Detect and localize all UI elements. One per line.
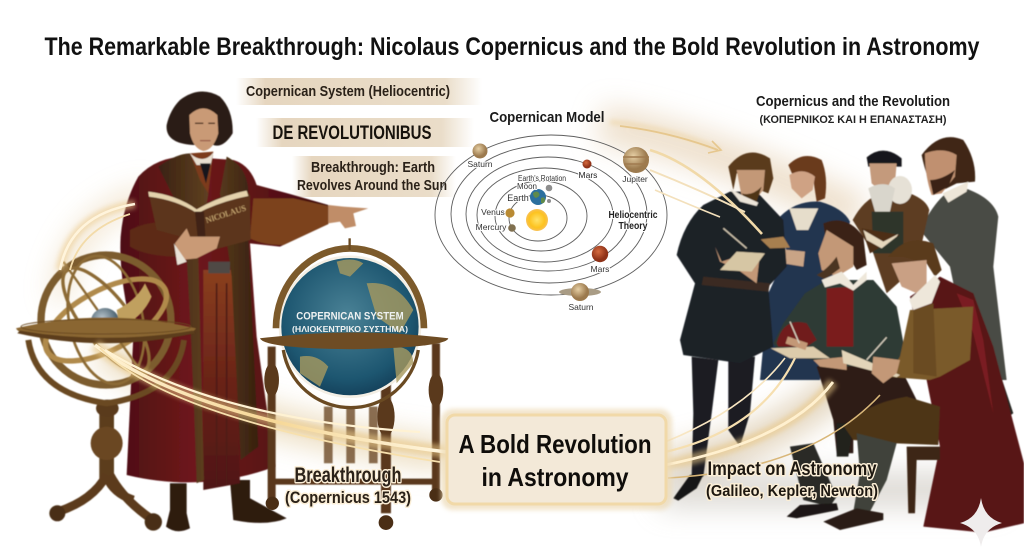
meridian arc	[276, 248, 424, 328]
heliocentric diagram	[435, 109, 667, 312]
caption: Impact on Astronomy	[706, 459, 878, 500]
pointing hand	[328, 205, 368, 228]
heading: Copernicus and the Revolution: Copernicus and the Revolution	[756, 94, 950, 110]
orbits	[435, 135, 667, 295]
planet: Mercury: Mercury	[476, 222, 507, 232]
gold streak: centre to scholars	[665, 358, 880, 478]
planet: upper Mars	[579, 160, 597, 180]
sun	[526, 209, 548, 231]
planet: Venus: Venus	[481, 207, 505, 217]
scholar: old man in ruff	[853, 151, 929, 293]
robe	[120, 157, 328, 482]
label: Heliocentric Theory: Heliocentric	[608, 209, 658, 221]
planet: upper Saturn	[467, 144, 493, 169]
hair	[167, 92, 233, 146]
shoes and legs	[166, 480, 287, 531]
horizon ring	[260, 332, 448, 349]
scholar: woman in blue	[760, 156, 850, 380]
heading: Copernicus and the Revolution	[756, 94, 950, 126]
globe labels: COPERNICAN SYSTEM	[296, 310, 404, 322]
scholar: seated man with red cape	[823, 240, 1024, 533]
sash band	[117, 283, 152, 328]
centre box: A Bold Revolution in Astronomy: A Bold Revolution	[458, 429, 652, 459]
left hand	[175, 228, 220, 260]
heading: Copernican Model: Copernican Model	[490, 109, 604, 126]
ribbon: De Revolutionibus	[256, 118, 474, 147]
globe sublabel: (ΗΛΙΟΚΕΝΤΡΙΚΟ ΣΥΣΤΗΜΑ)	[292, 324, 408, 334]
ribbon: De Revolutionibus: DE REVOLUTIONIBUS	[272, 123, 432, 144]
tunic	[203, 270, 240, 490]
caption: Breakthrough: Breakthrough	[294, 464, 402, 487]
continents	[300, 260, 413, 387]
armillary sphere	[16, 249, 196, 531]
heading: Copernicus and the Revolution: (ΚΟΠΕΡΝΙΚΟΣ ΚΑΙ Η ΕΠΑΝΑΣΤΑΣΗ)	[760, 114, 947, 126]
lower cradle	[28, 340, 184, 403]
planet: Earth with moon	[507, 174, 566, 205]
sparkle	[960, 498, 1002, 547]
planet: upper Mars: Mars	[579, 170, 597, 180]
scholar: seated man in red and green	[771, 220, 923, 518]
planet: Earth with moon: Earth	[507, 193, 529, 203]
label: Heliocentric Theory	[608, 209, 658, 232]
planet: upper Saturn: Saturn	[467, 159, 493, 169]
planet: lower Saturn: Saturn	[568, 302, 594, 312]
book	[148, 191, 251, 253]
belt	[208, 262, 230, 273]
rings	[33, 249, 179, 391]
gold arrow: model to scholars	[610, 122, 762, 234]
planet: Earth with moon: Earth's Rotation	[518, 174, 566, 183]
centre box: A Bold Revolution in Astronomy	[441, 409, 672, 510]
sphere	[91, 308, 119, 337]
ribbon: Copernican System	[236, 78, 482, 105]
ribbon: Earth revolves: Revolves Around the Sun	[297, 178, 447, 194]
ribbon: Earth revolves: Breakthrough: Earth	[311, 160, 435, 176]
caption: Impact on Astronomy: (Galileo, Kepler, Newton)	[706, 483, 878, 500]
horizon ring	[16, 317, 196, 342]
ribbon: Earth revolves	[292, 156, 456, 197]
fur trim	[158, 153, 258, 483]
label: Heliocentric Theory: Theory	[618, 220, 648, 232]
scholar: man in black doublet	[673, 152, 790, 501]
centre box: A Bold Revolution in Astronomy: in Astronomy	[482, 462, 629, 492]
planet: Venus	[481, 207, 515, 218]
collar and chest	[190, 152, 213, 193]
globe on stand	[260, 238, 448, 530]
stand legs	[270, 343, 436, 513]
gold streak: main sweep from armillary to centre	[95, 345, 447, 462]
background glow behind the streaks	[60, 125, 1000, 490]
caption: Breakthrough	[285, 464, 411, 507]
planet: Earth with moon: Moon	[517, 182, 537, 191]
face	[189, 108, 218, 151]
caption: Breakthrough: (Copernicus 1543)	[285, 489, 411, 507]
orange sleeve	[250, 198, 328, 245]
caption: Impact on Astronomy: Impact on Astronomy	[708, 459, 877, 480]
planet: Jupiter: Jupiter	[622, 174, 648, 184]
planet: lower Saturn	[559, 283, 601, 312]
Copernicus figure	[120, 92, 368, 531]
scholar: bearded man in grey	[920, 137, 1013, 430]
globe sphere	[280, 257, 420, 397]
base and feet	[85, 403, 129, 480]
gold streak: arc behind Copernicus	[60, 204, 135, 270]
lower left sleeve	[130, 222, 182, 257]
scholars group	[673, 137, 1024, 533]
book cover text: NICOLAUS	[204, 203, 248, 225]
planet: lower Mars	[591, 246, 609, 274]
ribbon: Copernican System: Copernican System (Heliocentric)	[246, 83, 450, 100]
planet: lower Mars: Mars	[591, 264, 609, 274]
planet: Jupiter	[622, 147, 649, 184]
